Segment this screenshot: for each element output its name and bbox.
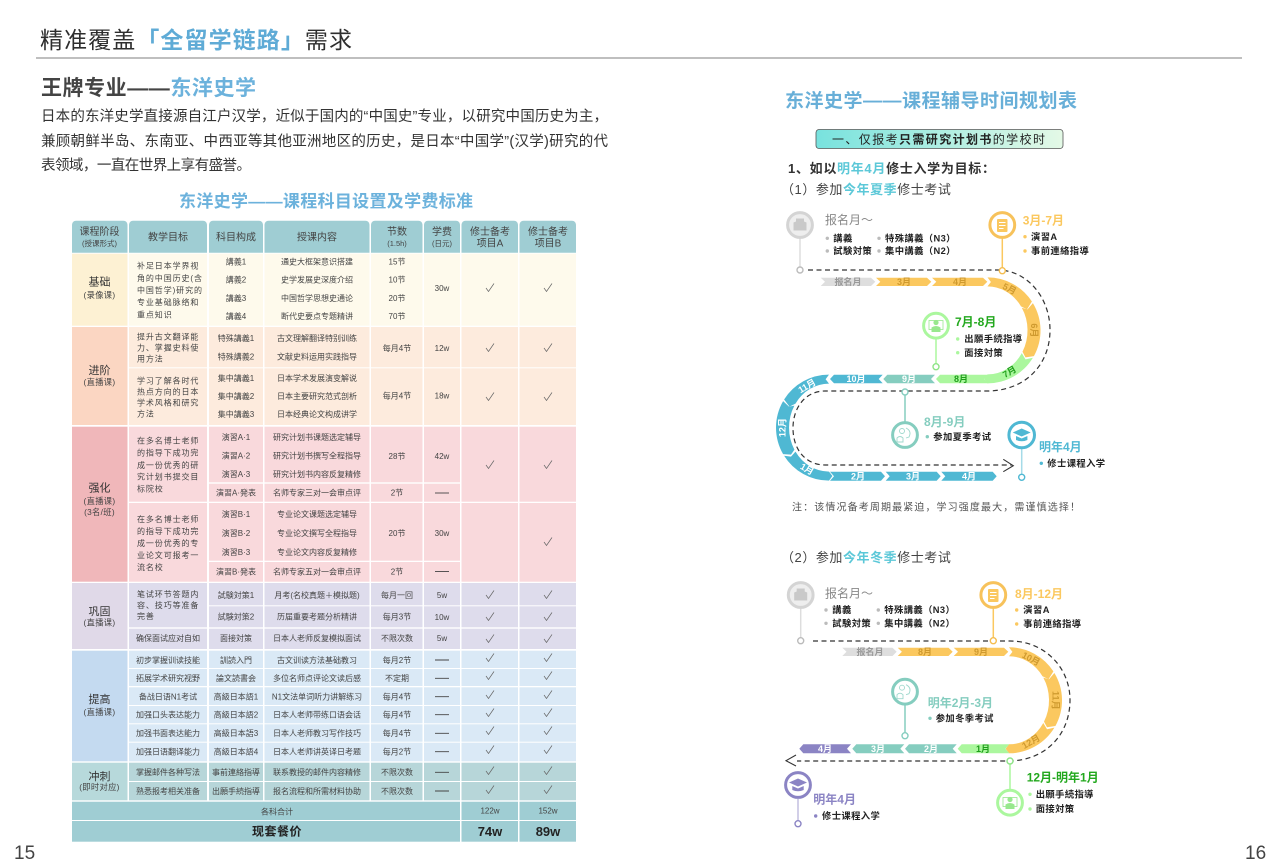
row group: advanced: 集中講義2 (218, 391, 255, 401)
row group: improvement: 每月2节 (383, 746, 411, 756)
pin: application (924, 313, 948, 370)
row group: basic: 通史大框架意识搭建 (281, 256, 353, 266)
row group: intensive: 在多名博士老师 (137, 436, 199, 446)
row group: advanced: 日本学术发展演变解说 (277, 373, 357, 383)
heading: schedule: 东洋史学——课程辅导时间规划表 (785, 89, 1077, 112)
row group: intensive: 28节 (389, 452, 405, 461)
row group: sprint: 不限次数 (381, 786, 413, 796)
heading: curriculum table: 东洋史学——课程科目设置及学费标准 (179, 191, 473, 211)
row group: sprint: (即时对应) (79, 782, 120, 792)
month ribbon: 11月 (796, 377, 818, 395)
row group: advanced: 每月4节 (383, 343, 411, 353)
row group: intensive: 30w (435, 529, 450, 538)
row group: advanced: 18w (435, 392, 450, 400)
intro paragraph (41, 108, 608, 174)
text: application: 面接対策 (1036, 803, 1075, 814)
table header row: 教学目标 (148, 230, 188, 244)
text: enrollment (1039, 439, 1105, 468)
row group: improvement: 日本人老师带练口语会话 (273, 710, 361, 720)
text: registration: 講義 (833, 232, 853, 244)
table header row: 项目B (535, 238, 562, 250)
row group: improvement: 高級日本語2 (214, 710, 259, 720)
table header row: 授课内容 (297, 230, 337, 244)
row group: improvement: 每月4节 (383, 728, 411, 738)
dashed route (797, 641, 1070, 761)
pin: summer exam (893, 389, 917, 447)
month ribbon (799, 646, 1062, 754)
text: exercises (1015, 587, 1082, 629)
pin: enrollment (786, 773, 810, 827)
row group: basic: 15节 (389, 258, 405, 266)
row group: improvement: 加强书面表达能力 (136, 728, 200, 738)
text: registration: 集中講義（N2） (885, 245, 956, 256)
text: registration (825, 212, 956, 256)
row group: intensive: (直播课) (84, 496, 115, 506)
dashed route (793, 270, 1050, 465)
row group: advanced: (直播课) (84, 377, 115, 387)
month ribbon: 3月 (871, 744, 885, 754)
row group: consolidation: 試験対策1 (218, 590, 255, 600)
heading: flagship major: 王牌专业——东洋史学 (41, 76, 256, 100)
page number 16: 16 (1245, 843, 1266, 864)
row: subtotal: 各科合计 (261, 806, 293, 816)
row group: improvement: 每月2节 (383, 655, 411, 665)
row group: consolidation: 不限次数 (381, 633, 413, 643)
pin: registration (788, 583, 813, 644)
row group: intensive: 演習A·3 (222, 469, 251, 479)
arrowhead (1003, 459, 1013, 472)
row group: intensive: 名师专家三对一会审点评 (273, 488, 361, 498)
callout: application condition: 一、仅报考只需研究计划书的学校时 (832, 132, 1045, 146)
month ribbon: 8月 (918, 647, 932, 657)
month ribbon (776, 276, 1041, 481)
row group: basic: 講義4 (226, 311, 247, 321)
row group: intensive: 成一份优秀的研 (137, 460, 199, 470)
row group: intensive: 演習B·発表 (216, 566, 256, 576)
intro paragraph: 日本的东洋史学直接源自江户汉学，近似于国内的“中国史”专业，以研究中国历史为主， (41, 108, 608, 125)
month ribbon: 报名月 (856, 646, 884, 657)
text: exercises: 演習A (1023, 604, 1050, 615)
row group: basic: 講義2 (226, 274, 247, 284)
row group: improvement: 古文训读方法基础教习 (277, 655, 357, 665)
pin: enrollment (1009, 422, 1034, 480)
row group: improvement: 每月4节 (383, 692, 411, 702)
row group: improvement: 备战日语N1考试 (139, 692, 197, 702)
row group: improvement: 每月4节 (383, 710, 411, 720)
row group: basic: 30w (435, 284, 450, 293)
text: registration (824, 586, 955, 628)
row group: sprint (72, 763, 576, 800)
row group: basic: 专业基础脉络和 (137, 297, 199, 307)
month ribbon: 4月 (953, 277, 967, 287)
month ribbon: 1月 (798, 461, 816, 477)
row group: consolidation: 日本人老师反复模拟面试 (273, 633, 361, 643)
timeline 1: summer exam route (776, 212, 1105, 481)
table header row: 修士备考 (528, 225, 568, 238)
row group: intensive: 研究计划书撰写全程指导 (273, 450, 361, 460)
row group: advanced: 12w (435, 344, 450, 353)
text: registration: 报名月～ (825, 586, 873, 600)
intro paragraph: 兼顾朝鲜半岛、东南亚、中西亚等其他亚洲地区的历史，是日本“中国学”(汉学)研究的代 (41, 132, 608, 150)
text: summer exam (924, 415, 992, 442)
row group: basic: 史学发展史深度介绍 (281, 274, 353, 284)
row group: advanced: 学术风格和研究 (137, 398, 199, 408)
row group: advanced: 用方法 (137, 354, 164, 364)
row group: advanced: 提升古文翻译能 (137, 332, 199, 342)
month ribbon: 4月 (818, 744, 832, 754)
row group: sprint: 报名流程和所需材料协助 (273, 786, 361, 796)
row group: advanced (72, 327, 576, 425)
row group: sprint: 事前連絡指導 (212, 767, 260, 777)
arrowhead (786, 755, 796, 766)
row group: improvement: (直播课) (84, 707, 115, 717)
row group: intensive: 研究计划书内容反复精修 (273, 469, 361, 479)
row group: intensive: 2节 (391, 568, 403, 576)
row group: sprint: 冲刺 (88, 769, 110, 783)
row group: intensive: 20节 (389, 529, 405, 538)
table header row: 科目构成 (216, 230, 256, 244)
row group: improvement: 日本人老师教习写作技巧 (273, 728, 361, 738)
row group: improvement: 論文読書会 (216, 673, 256, 683)
text: winter exam: 明年2月-3月 (928, 695, 993, 710)
month ribbon: 10月 (846, 374, 866, 384)
row group: consolidation: 每月3节 (383, 612, 411, 622)
row group: basic: 講義3 (226, 293, 247, 303)
row group: sprint: 不限次数 (381, 767, 413, 777)
subheading: winter exam: （2）参加今年冬季修士考试 (781, 550, 951, 565)
table header row (72, 221, 576, 253)
row group: intensive (72, 427, 576, 582)
month ribbon: 1月 (976, 744, 990, 754)
row group: improvement: 初步掌握训读技能 (136, 655, 200, 665)
row group: consolidation: 5w (437, 591, 447, 600)
text: winter exam: 参加冬季考试 (936, 712, 994, 724)
row group: advanced: 古文理解翻译特别训练 (277, 333, 357, 343)
row group: consolidation: 月考(名校真题＋模拟题) (274, 590, 360, 600)
intro paragraph: 表领域，一直在世界上享有盛誉。 (41, 157, 251, 174)
row group: sprint: 联系教授的邮件内容精修 (273, 767, 361, 777)
month ribbon: 4月 (962, 471, 976, 481)
text: application: 7月-8月 (955, 315, 996, 329)
table header row: 项目A (477, 238, 504, 250)
row group: sprint: 熟悉报考相关准备 (136, 786, 200, 796)
row group: intensive: 究计划书提交目 (137, 472, 199, 482)
row group: intensive: 专业论文课题选定辅导 (277, 509, 357, 519)
row group: consolidation: 容、技巧等准备 (137, 600, 199, 610)
row group: intensive: 2节 (391, 488, 403, 498)
pin: registration (788, 213, 812, 273)
row group: consolidation: 5w (437, 634, 447, 643)
row group: intensive: 研究计划书课题选定辅导 (273, 432, 361, 442)
row group: improvement: 高級日本語3 (214, 728, 259, 738)
text: exercises: 事前連絡指導 (1023, 618, 1082, 629)
row group: intensive: 演習B·1 (222, 509, 251, 519)
page number 15: 15 (14, 843, 35, 864)
text: summer exam: 参加夏季考试 (933, 431, 992, 442)
row group: basic: 70节 (389, 312, 405, 321)
row group: advanced: 日本经典论文构成讲学 (277, 409, 357, 419)
text: application (955, 315, 1023, 358)
text: enrollment (813, 792, 880, 821)
row group: advanced: 特殊講義2 (218, 352, 255, 362)
row group: advanced: 文献史料运用实践指导 (277, 352, 357, 362)
month ribbon: 10月 (1020, 650, 1042, 668)
row: subtotal: 152w (538, 806, 558, 816)
text: registration: 試験対策 (832, 618, 871, 628)
table header row: 节数 (387, 225, 407, 238)
row group: improvement: 加强口头表达能力 (136, 710, 200, 720)
row: subtotal: 122w (480, 806, 500, 816)
text: exercises: 8月-12月 (1015, 587, 1063, 601)
row group: advanced: 力、掌握史料使 (137, 342, 199, 352)
table header row: (授课形式) (82, 238, 117, 248)
row group: improvement: 提高 (88, 692, 110, 706)
subheading: summer exam: （1）参加今年夏季修士考试 (781, 182, 951, 197)
text: registration: 报名月～ (825, 212, 873, 227)
text: application (1027, 770, 1099, 814)
subheading: goal: 1、如以明年4月修士入学为目标： (788, 161, 996, 176)
row group: intensive: 的指导下成功完 (137, 448, 199, 458)
month ribbon: 3月 (906, 471, 920, 481)
pin: exercises (990, 213, 1015, 274)
text: exercises: 事前連絡指導 (1031, 245, 1089, 256)
row group: intensive: 演習A·発表 (216, 488, 256, 498)
row group: intensive: 成一份优秀的专 (137, 538, 199, 548)
row group: intensive: 流名校 (137, 562, 164, 572)
text: registration: 特殊講義（N3） (884, 604, 955, 615)
month ribbon: 12月 (778, 418, 788, 437)
text: registration: 特殊講義（N3） (885, 232, 956, 244)
row group: consolidation: 試験対策2 (218, 612, 255, 622)
row group: intensive: 专业论文撰写全程指导 (277, 528, 357, 538)
row group: basic: 講義1 (226, 256, 247, 266)
table header row: 修士备考 (470, 225, 510, 238)
row group: consolidation: 笔试环节答题内 (137, 589, 199, 599)
month ribbon: 9月 (974, 647, 988, 657)
row group: sprint: 出願手続指導 (212, 786, 260, 796)
row: package price: 现套餐价 (252, 824, 302, 838)
row: subtotal (72, 802, 576, 820)
row group: intensive: 演習B·2 (222, 528, 251, 538)
callout: application condition (816, 130, 1063, 148)
row group: advanced: 热点方向的日本 (137, 386, 199, 396)
timeline 2: winter exam route (786, 583, 1099, 827)
month ribbon: 报名月 (834, 276, 862, 287)
month ribbon: 3月 (897, 277, 911, 287)
text: registration: 試験対策 (833, 245, 872, 256)
row group: consolidation: 确保面试应对自如 (136, 633, 200, 643)
row group: improvement: 不定期 (385, 673, 409, 683)
text: application: 12月-明年1月 (1027, 770, 1099, 784)
row: package price (72, 821, 576, 842)
month ribbon: 11月 (1050, 691, 1060, 710)
month ribbon: 12月 (1020, 733, 1042, 751)
pin: exercises (981, 583, 1006, 644)
row group: consolidation: (直播课) (84, 618, 115, 628)
month ribbon: 7月 (1001, 364, 1018, 380)
text: registration: 集中講義（N2） (884, 618, 955, 628)
row: package price: 89w (536, 824, 561, 839)
table header row: (1.5h) (387, 239, 407, 248)
row group: consolidation: 面接対策 (220, 633, 252, 643)
table: curriculum and tuition (72, 221, 576, 842)
text: winter exam (928, 695, 994, 724)
row group: improvement: 訓読入門 (220, 655, 252, 665)
text: exercises: 演習A (1031, 231, 1058, 242)
row group: basic: (录像课) (84, 290, 115, 300)
text: exercises: 3月-7月 (1023, 214, 1064, 228)
row group: improvement (72, 651, 576, 761)
text: enrollment: 修士课程入学 (1047, 458, 1105, 468)
title: 精准覆盖「全留学链路」需求 (40, 27, 352, 53)
row group: consolidation: 巩固 (88, 605, 110, 618)
row: package price: 74w (478, 824, 503, 839)
text: enrollment: 明年4月 (813, 792, 856, 806)
row group: basic: 基础 (88, 276, 110, 288)
row group: intensive: 42w (435, 452, 450, 461)
row group: basic: 补足日本学界视 (137, 260, 199, 270)
row group: sprint: 掌握邮件各种写法 (136, 767, 200, 777)
row group: basic: 10节 (389, 276, 405, 284)
row group: basic: 20节 (389, 294, 405, 303)
row group: advanced: 方法 (137, 408, 155, 418)
row group: intensive: 演習A·1 (222, 432, 251, 442)
row group: basic: 中国哲学)研究的 (137, 285, 203, 295)
note: 注：该情况备考周期最紧迫，学习强度最大，需谨慎选择！ (792, 500, 1080, 514)
row group: basic: 角的中国历史(含 (137, 273, 203, 283)
row group: improvement: 多位名师点评论文读后感 (273, 673, 361, 683)
text: summer exam: 8月-9月 (924, 415, 965, 429)
row group: intensive: 名师专家五对一会审点评 (273, 566, 361, 576)
row group: consolidation (72, 583, 576, 649)
text: enrollment: 修士课程入学 (822, 810, 880, 821)
row group: basic: 重点知识 (137, 310, 173, 320)
row group: intensive: 专业论文内容反复精修 (277, 547, 357, 557)
row group: advanced: 日本主要研究范式剖析 (277, 391, 357, 401)
row group: advanced: 集中講義3 (218, 409, 255, 419)
text: registration: 講義 (832, 604, 852, 615)
table header row: 课程阶段 (80, 225, 120, 238)
row group: intensive: 在多名博士老师 (137, 514, 199, 524)
row group: improvement: 高級日本語4 (214, 746, 259, 756)
row group: improvement: 高級日本語1 (214, 692, 259, 702)
table header row: (日元) (432, 239, 452, 248)
text: application: 出願手続指導 (1036, 788, 1094, 800)
row group: basic: 断代史要点专题精讲 (281, 311, 353, 321)
row group: basic: 中国哲学思想史通论 (281, 293, 353, 303)
text: enrollment: 明年4月 (1039, 439, 1082, 454)
row group: improvement: N1文法单词听力讲解练习 (272, 692, 362, 702)
row group: consolidation: 10w (435, 613, 450, 622)
row group: intensive: 业论文可报考一 (137, 550, 199, 560)
row group: intensive: (3名/班) (84, 507, 115, 517)
table header row: 学费 (432, 225, 452, 238)
month ribbon: 6月 (1029, 323, 1039, 337)
month ribbon: 2月 (851, 471, 865, 481)
row group: advanced: 特殊講義1 (218, 333, 255, 343)
row group: consolidation: 历届重要考题分析精讲 (277, 612, 357, 622)
row group: advanced: 集中講義1 (218, 373, 255, 383)
text: application: 面接対策 (964, 347, 1003, 358)
month ribbon: 2月 (924, 744, 938, 754)
row group: improvement: 拓展学术研究视野 (136, 673, 200, 683)
row group: consolidation: 完善 (137, 611, 155, 621)
text: exercises (1023, 214, 1089, 256)
month ribbon: 8月 (954, 374, 968, 384)
pin: application (998, 758, 1022, 815)
row group: intensive: 演習B·3 (222, 547, 251, 557)
row group: intensive: 演習A·2 (222, 450, 251, 460)
row group: advanced: 学习了解各时代 (137, 376, 199, 386)
row group: intensive: 标院校 (137, 484, 164, 494)
row group: improvement: 加强日语翻译能力 (136, 746, 200, 756)
row group: advanced: 进阶 (88, 363, 110, 377)
row group: improvement: 日本人老师讲英译日考题 (273, 746, 361, 756)
row group: advanced: 每月4节 (383, 390, 411, 400)
row group: basic (72, 254, 576, 326)
text: application: 出願手続指導 (964, 333, 1023, 344)
row group: intensive: 强化 (88, 480, 110, 494)
row group: intensive: 的指导下成功完 (137, 526, 199, 536)
pin: winter exam (893, 679, 917, 739)
month ribbon: 5月 (1001, 281, 1018, 297)
row group: consolidation: 每月一回 (381, 590, 413, 600)
month ribbon: 9月 (902, 374, 916, 384)
